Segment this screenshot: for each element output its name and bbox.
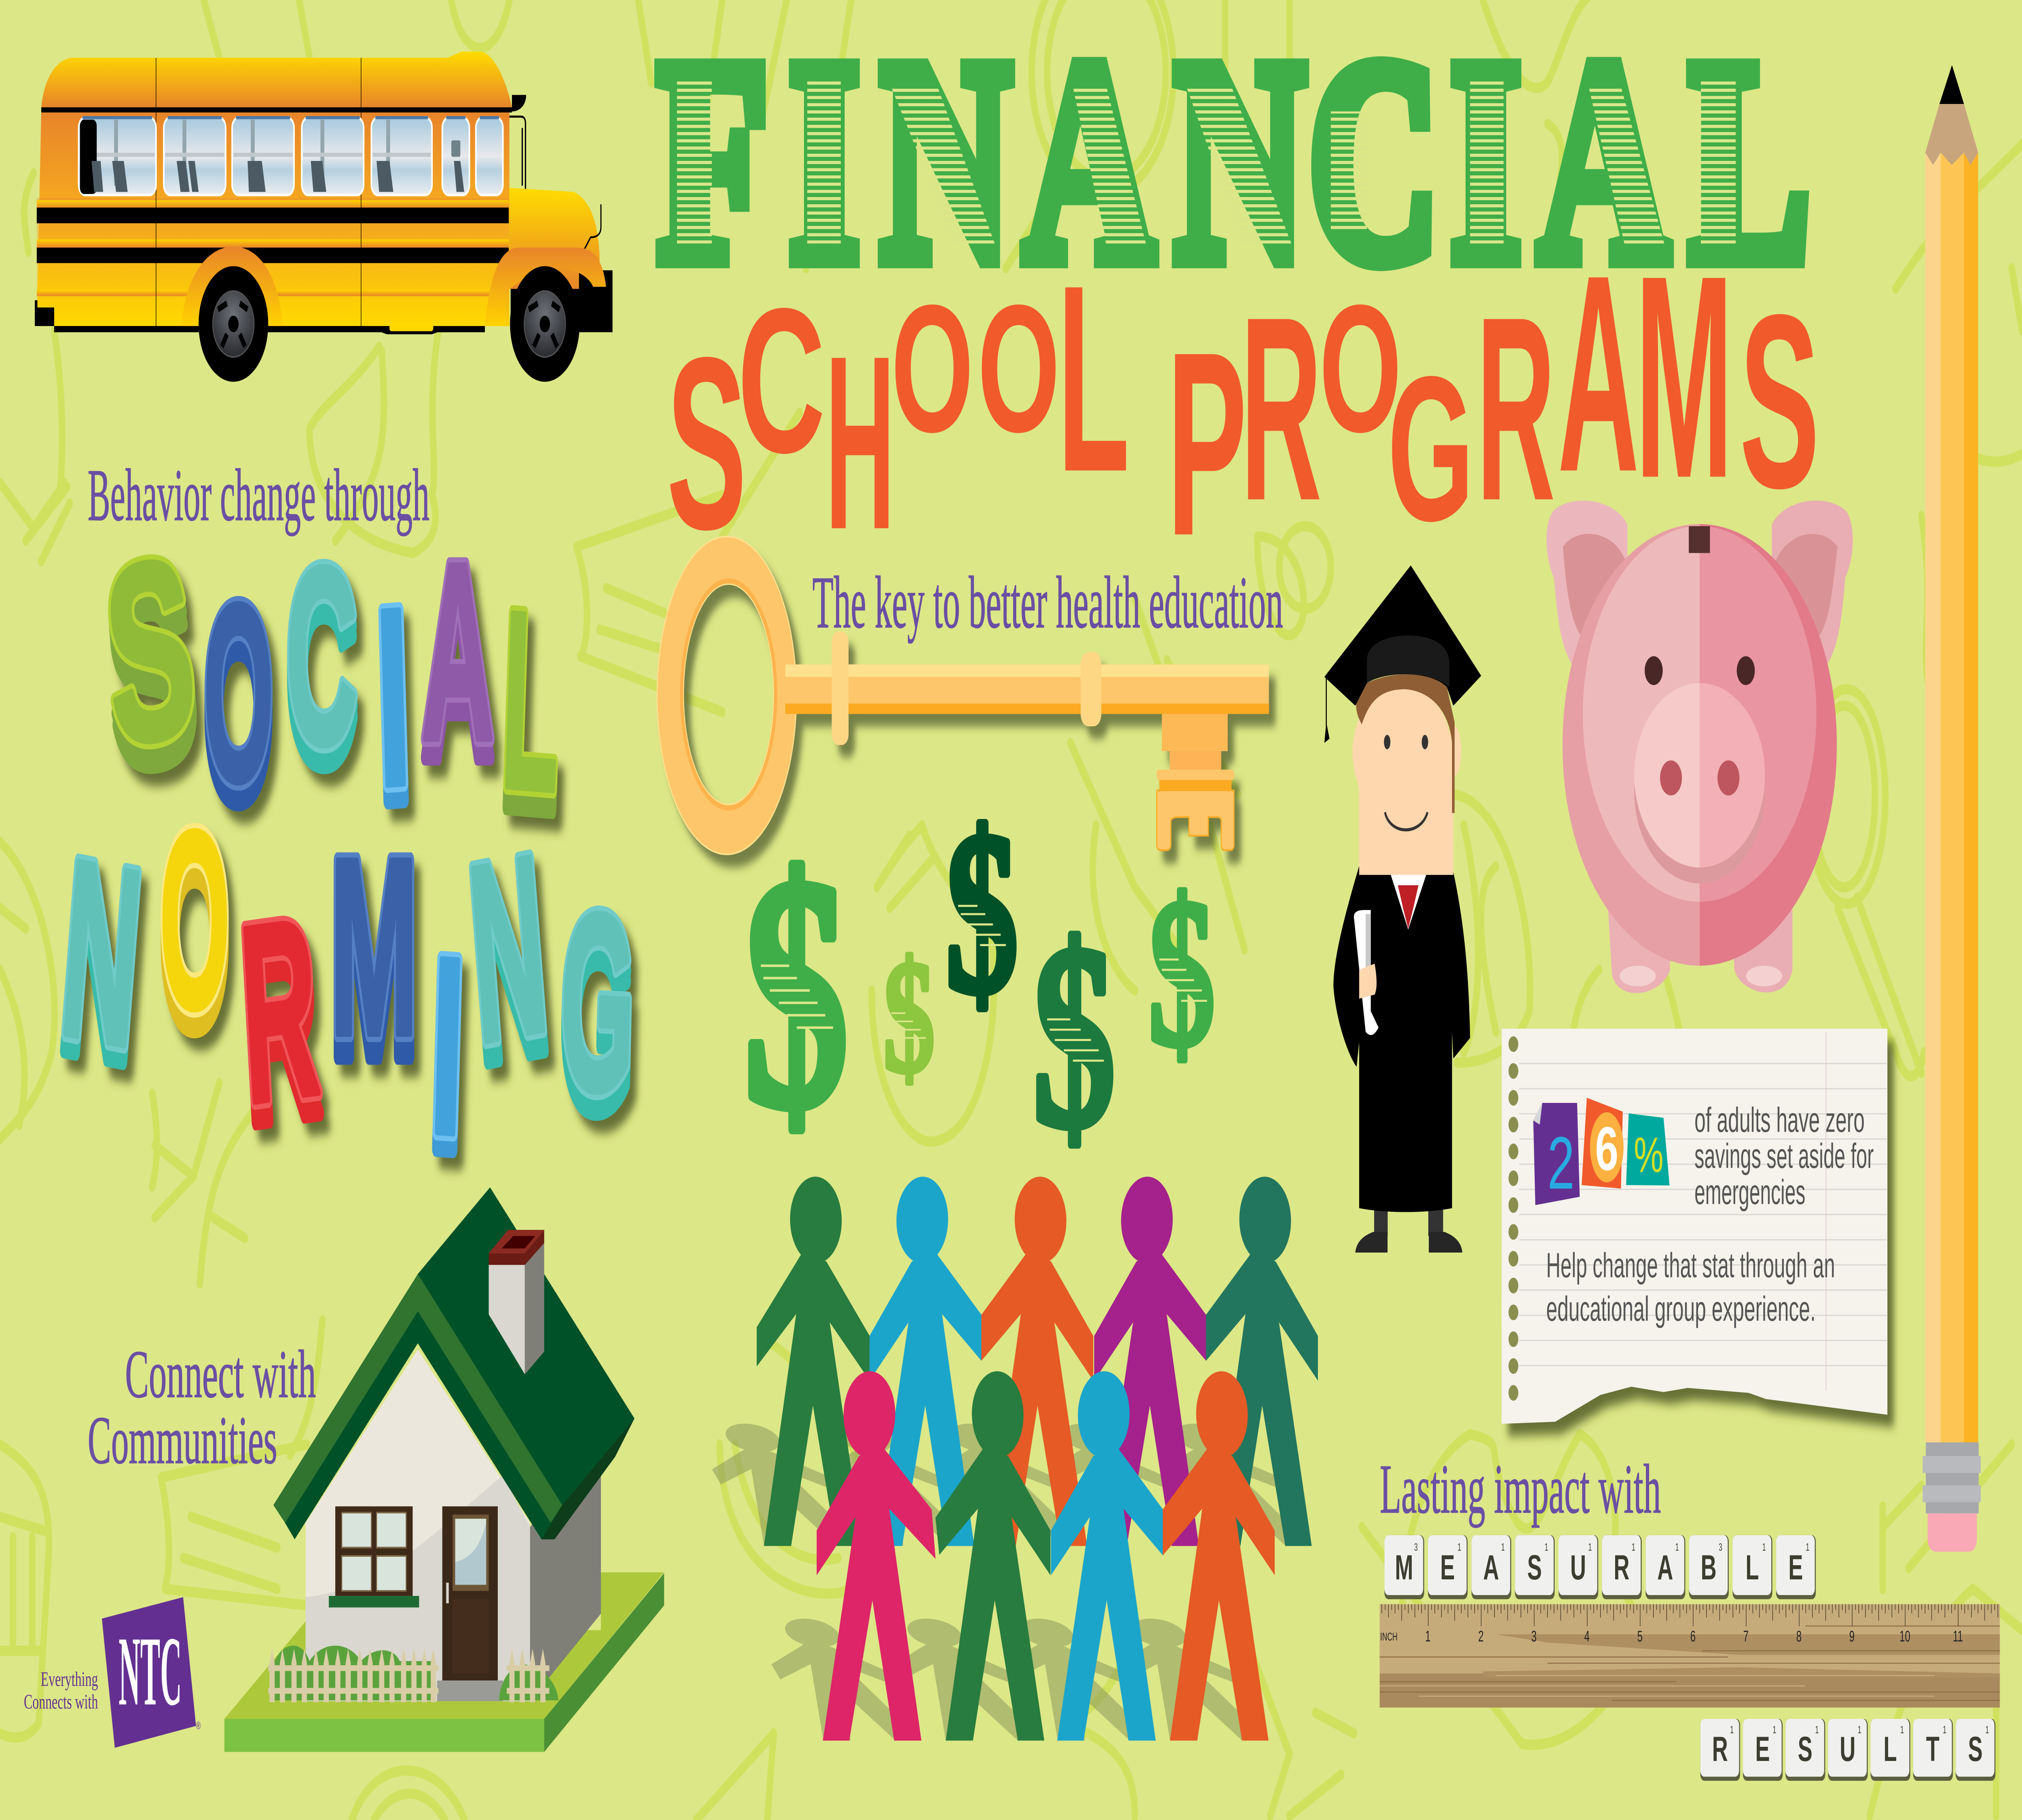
person: teal xyxy=(1206,1169,1318,1546)
letter A: A xyxy=(422,511,494,792)
door step xyxy=(437,1680,503,1701)
title: SCHOOL PROGRAMS: A xyxy=(1558,216,1639,530)
heading: connect with communities xyxy=(88,1337,316,1478)
graduate gown xyxy=(1333,866,1470,1212)
letter N xyxy=(461,802,556,1116)
bus front wheel xyxy=(510,266,580,382)
bus front bumper xyxy=(511,270,613,332)
graduate legs and shoes xyxy=(1355,1203,1462,1253)
NTC logo: NTC xyxy=(118,1617,182,1726)
letter N: N xyxy=(461,802,554,1095)
bus hood xyxy=(508,188,600,289)
letter I: I xyxy=(427,921,467,1204)
picket fence xyxy=(268,1649,549,1702)
pig legs xyxy=(1607,887,1792,993)
graduate face xyxy=(1352,689,1453,875)
house side wall xyxy=(530,1444,601,1701)
pig ears xyxy=(1546,501,1853,677)
people: front row paper chain xyxy=(816,1363,1275,1741)
pig coin slot xyxy=(1689,526,1710,553)
ruler numbers: 6 xyxy=(1690,1627,1696,1645)
letter G xyxy=(558,859,638,1166)
heading: SOCIAL NORMING xyxy=(53,503,638,1204)
letter I: I xyxy=(427,904,468,1187)
torn note paper xyxy=(1502,1029,1887,1424)
ruler numbers: 10 xyxy=(1899,1627,1910,1645)
letter S: S xyxy=(99,528,205,824)
tile backs xyxy=(1701,1719,1995,1781)
registered mark: ® xyxy=(196,1720,201,1732)
title: SCHOOL PROGRAMS xyxy=(667,216,1819,590)
dollar sign right green: $ xyxy=(1148,855,1215,1090)
people: shadows xyxy=(685,1424,1318,1741)
letter O: O xyxy=(204,562,273,844)
bus rear wheel xyxy=(199,266,268,382)
letter N: N xyxy=(54,806,150,1100)
title: SCHOOL PROGRAMS: S xyxy=(1740,263,1819,540)
tile letters: RESULTS xyxy=(1712,1730,1983,1769)
person: blue xyxy=(1051,1363,1163,1741)
pig snout xyxy=(1634,683,1765,883)
key bit xyxy=(1157,714,1234,850)
letter C: C xyxy=(286,525,357,806)
tile faces xyxy=(1384,1535,1815,1595)
graduate xyxy=(1324,565,1481,1253)
heading: connect with communities: Communities xyxy=(88,1403,277,1478)
title: SCHOOL PROGRAMS: P xyxy=(1167,298,1247,590)
school bus xyxy=(35,52,613,382)
tile values: 1111111 xyxy=(1730,1724,1989,1736)
person: orange xyxy=(1163,1363,1275,1741)
title: SCHOOL PROGRAMS: R xyxy=(1241,262,1322,555)
note text: call to action xyxy=(1546,1246,1835,1328)
note text: statistic: savings set aside for xyxy=(1694,1137,1874,1176)
letter C: C xyxy=(286,515,357,796)
letter O: O xyxy=(204,552,273,833)
dollar signs xyxy=(744,785,1215,1181)
title: SCHOOL PROGRAMS: M xyxy=(1635,216,1733,538)
stat tile: 2: 2 xyxy=(1548,1122,1574,1204)
title: SCHOOL PROGRAMS: L xyxy=(1058,230,1129,527)
title: SCHOOL PROGRAMS: H xyxy=(825,305,895,581)
note text: call to action: educational group experience. xyxy=(1546,1290,1816,1328)
letter A: A xyxy=(422,511,494,792)
heading: connect with communities: Connect with xyxy=(125,1337,316,1412)
letter G: G xyxy=(558,859,638,1145)
pencil xyxy=(1923,65,1981,1552)
letter L: L xyxy=(498,579,564,864)
heading: lasting impact with: Lasting impact with xyxy=(1380,1450,1661,1528)
golden key xyxy=(657,537,1269,854)
person: green xyxy=(935,1363,1051,1741)
dollar sign small lime: $ xyxy=(883,927,935,1106)
person: blue xyxy=(869,1169,981,1546)
key bow inner ring xyxy=(681,581,776,808)
letter G: G xyxy=(558,880,637,1166)
tile values: 3111111311 xyxy=(1414,1541,1809,1553)
letter tiles: MEASURABLE xyxy=(1384,1535,1816,1599)
letter I: I xyxy=(373,555,414,838)
key collar xyxy=(1081,652,1101,726)
letter M xyxy=(330,806,418,1110)
graduate cap xyxy=(1324,565,1481,743)
title: SCHOOL PROGRAMS: R xyxy=(1476,262,1555,555)
ruler numbers: 9 xyxy=(1849,1627,1855,1645)
letter R: R xyxy=(236,886,326,1177)
letter C xyxy=(286,515,357,817)
tile backs xyxy=(1384,1535,1816,1599)
wooden ruler xyxy=(1380,1604,2000,1708)
stat tile: 6 xyxy=(1582,1098,1624,1189)
house on lawn xyxy=(224,1187,664,1752)
letter I: I xyxy=(373,555,414,838)
letter O: O xyxy=(160,800,230,1081)
bus front wheel arch xyxy=(485,248,606,326)
key bow xyxy=(657,537,796,854)
roof xyxy=(273,1187,635,1539)
stat tile: percent xyxy=(1626,1113,1670,1185)
graduate neck and tie xyxy=(1390,871,1428,929)
letter M: M xyxy=(330,829,418,1110)
ruler wood xyxy=(1380,1604,2000,1708)
stat tile: percent: % xyxy=(1634,1128,1664,1183)
letter N: N xyxy=(54,806,150,1100)
tile faces xyxy=(1701,1719,1995,1777)
letter M: M xyxy=(330,806,418,1087)
pencil barrel xyxy=(1925,153,1978,1442)
pencil wood xyxy=(1925,104,1978,165)
letter G: G xyxy=(558,859,638,1145)
letter O: O xyxy=(204,573,273,854)
bus visor and mirror xyxy=(510,95,526,198)
letter tiles: RESULTS xyxy=(1701,1719,1995,1781)
letter A: A xyxy=(422,529,494,811)
graduate eyes and smile xyxy=(1384,735,1428,830)
logo tagline: Everything xyxy=(41,1668,98,1691)
heading: behavior change through: Behavior change through xyxy=(88,455,429,536)
letter A xyxy=(422,511,494,811)
NTC logo xyxy=(24,1597,201,1748)
people: back row paper chain xyxy=(757,1169,1318,1546)
title: SCHOOL PROGRAMS: O xyxy=(891,267,974,470)
logo tagline xyxy=(24,1668,98,1713)
ruler numbers xyxy=(1380,1627,1963,1645)
letter I: I xyxy=(427,904,468,1187)
logo tagline: Connects with xyxy=(24,1691,98,1713)
dollar sign mid green: $ xyxy=(1033,891,1115,1181)
bushes xyxy=(275,1646,558,1700)
title: SCHOOL PROGRAMS: O xyxy=(977,267,1060,470)
ruler numbers: INCH xyxy=(1380,1630,1398,1643)
ruler ticks xyxy=(1380,1604,2000,1629)
letter O: O xyxy=(204,552,273,833)
logo tile xyxy=(102,1597,196,1748)
letter N: N xyxy=(463,822,556,1116)
door xyxy=(442,1506,498,1680)
letter I: I xyxy=(373,571,415,855)
key shaft xyxy=(785,665,1269,714)
graduate diploma xyxy=(1354,910,1379,1035)
dollar sign dark green: $ xyxy=(946,785,1018,1041)
graduate hair xyxy=(1356,674,1455,813)
paper sheet xyxy=(1502,1029,1887,1424)
person: orange xyxy=(981,1169,1093,1546)
letter N xyxy=(53,806,150,1116)
note text: statistic: of adults have zero xyxy=(1694,1101,1865,1140)
note text: statistic xyxy=(1694,1101,1874,1212)
letter S: S xyxy=(97,503,203,799)
window xyxy=(329,1506,419,1607)
bus rear bumper xyxy=(35,300,485,334)
letter O: O xyxy=(160,789,230,1071)
pig body xyxy=(1563,524,1837,966)
pig face xyxy=(1583,526,1817,902)
ruler numbers: 5 xyxy=(1637,1627,1643,1645)
letter L: L xyxy=(498,558,564,844)
letter R xyxy=(235,865,326,1177)
bus body xyxy=(37,112,510,326)
note text: call to action: Help change that stat through an xyxy=(1546,1246,1835,1285)
house front wall xyxy=(306,1350,530,1701)
letter R: R xyxy=(235,865,324,1156)
title: FINANCIAL: FINANCIAL xyxy=(658,0,1810,320)
ruler numbers: 2 xyxy=(1478,1627,1484,1645)
person: pink xyxy=(816,1363,935,1741)
letter G: G xyxy=(558,870,637,1155)
title: SCHOOL PROGRAMS: G xyxy=(1387,334,1474,564)
ruler numbers: 1 xyxy=(1425,1627,1431,1645)
pig eyes xyxy=(1645,656,1755,685)
letter O: O xyxy=(160,779,230,1060)
letter M: M xyxy=(330,806,418,1087)
title: SCHOOL PROGRAMS: S xyxy=(667,307,747,581)
letter L: L xyxy=(498,558,564,844)
ruler numbers: 8 xyxy=(1796,1627,1802,1645)
bus rear wheel arch xyxy=(182,247,282,326)
ruler numbers: 7 xyxy=(1743,1627,1749,1645)
ruler numbers: 3 xyxy=(1531,1627,1537,1645)
letter C: C xyxy=(286,535,357,817)
pencil eraser xyxy=(1928,1513,1977,1552)
letter O xyxy=(160,779,230,1081)
letter N: N xyxy=(53,822,148,1116)
letter S: S xyxy=(97,503,203,799)
tile letters: MEASURABLE xyxy=(1395,1548,1803,1587)
title: SCHOOL PROGRAMS: O xyxy=(1319,267,1402,470)
piggy bank xyxy=(1546,501,1853,993)
bus windows xyxy=(79,118,503,195)
key collar xyxy=(832,631,848,745)
stat tile: 2 xyxy=(1533,1103,1580,1205)
letter L xyxy=(498,558,564,864)
paper binder holes xyxy=(1508,1036,1518,1401)
letter O xyxy=(204,552,273,854)
bus roof xyxy=(41,52,512,107)
title hatching xyxy=(677,78,1736,245)
paper rules xyxy=(1519,1064,1887,1366)
lawn xyxy=(224,1572,664,1752)
pencil ferrule xyxy=(1923,1442,1981,1513)
note text: statistic: emergencies xyxy=(1694,1173,1805,1212)
letter C: C xyxy=(286,515,357,796)
stat tile: 6: 6 xyxy=(1595,1114,1618,1183)
letter N: N xyxy=(461,802,554,1095)
person: green xyxy=(757,1169,870,1546)
ruler numbers: 4 xyxy=(1584,1627,1590,1645)
dollar sign large green: $ xyxy=(744,810,848,1176)
heading: the key to better health education: The key to better health education xyxy=(812,562,1283,644)
person: purple xyxy=(1094,1169,1206,1546)
chimney xyxy=(489,1230,544,1374)
pencil tip xyxy=(1940,65,1964,104)
letter R: R xyxy=(235,865,324,1156)
letter S: S xyxy=(98,516,204,811)
letter O: O xyxy=(160,779,230,1060)
ruler numbers: 11 xyxy=(1953,1627,1963,1645)
title: SCHOOL PROGRAMS: C xyxy=(738,266,825,496)
